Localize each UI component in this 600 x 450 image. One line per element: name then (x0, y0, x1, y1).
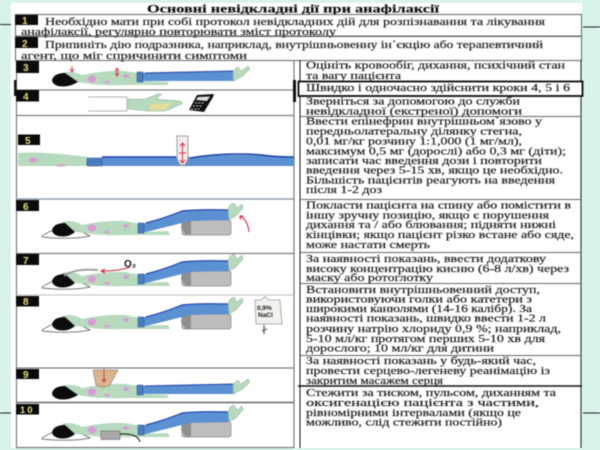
panel: step 4 call for help: 4 (23, 92, 29, 103)
panel: step 9 CPR: 9 (23, 370, 29, 381)
text: step 4 call: Зверніться за допомогою до служби (306, 96, 520, 108)
text: step 5 epinephrine: після 1-2 доз (306, 184, 382, 196)
step 1 box (15, 14, 582, 38)
icon: saline bag: 0,9% (257, 305, 272, 312)
icon: blood pressure cuff (101, 431, 140, 442)
step 2 badge: 2 (22, 39, 28, 50)
slide rule right bottom (583, 412, 600, 414)
panel: step 3 assessment (16, 61, 250, 86)
panel: step 8 IV access (16, 296, 282, 334)
text: step 4 call: невідкладної (екстреної) допомоги (306, 106, 522, 118)
text: step 8 IV access: використовуючи голки або катетери з (306, 294, 532, 306)
text: step 5 epinephrine: максимум 0,5 мг (дорослі) або 0,3 мг (діти); (306, 146, 566, 158)
panel: step 5 epinephrine injection (18, 134, 294, 166)
step 1 badge (15, 15, 38, 27)
step 2 text: Припиніть дію подразника, наприклад, внутрішньовенну ін᾿єкцію або терапевтичний (45, 39, 543, 51)
panel: step 4 call for help (16, 90, 214, 112)
text: step 5 epinephrine: 0,01 мг/кг розчину 1:1,000 (1 мг/мл), (306, 136, 522, 148)
text: step 6 position: може настати смерть (306, 239, 430, 251)
icon: sleeve and hand (88, 94, 183, 111)
callout: perform steps 4, 5 and 6 (298, 82, 582, 96)
panel: step 3 assessment: 3 (23, 63, 29, 74)
text: step 8 IV access: 5-10 мл/кг протягом перших 5-10 хв для (306, 333, 545, 345)
text: step 6 position: кінцівки; якщо пацієнт різко встане або сяде, (306, 229, 574, 241)
text: step 5 epinephrine: Більшість пацієнтів реагують на введення (306, 174, 555, 186)
text: step 8 IV access: дорослого; 10 мл/кг для дитини (306, 342, 494, 354)
icon: compression hands (93, 369, 118, 387)
text: step 10 monitoring: оксигенацією пацієнта з частими, (306, 397, 539, 409)
text: step 6 position: дихання та / або блювання; підняти нижні (306, 219, 556, 231)
text: step 9 CPR: провести серцево-легеневу реанімацію із (306, 365, 550, 377)
text: step 5 epinephrine (306, 116, 566, 196)
icon: saline bag (255, 296, 282, 334)
panel: step 10 monitoring: 10 (20, 405, 35, 416)
panel: step 5 epinephrine injection: 5 (25, 136, 31, 147)
text: step 5 epinephrine: Ввести епінефрин внутрішньом`язово у (306, 116, 543, 128)
panel: step 7 oxygen (16, 254, 243, 289)
panel: step 6 raise legs (16, 200, 249, 238)
label: O2: O₂ (124, 259, 136, 270)
text: step 9 CPR (306, 355, 550, 387)
text: step 10 monitoring: можливо, слід стежити постійно) (306, 416, 502, 428)
panel: step 6 raise legs: 6 (23, 202, 29, 213)
text: step 7 oxygen: За наявності показань, ввести додаткову (306, 253, 547, 265)
text: step 8 IV access: широкими канюлями (14-16 калібр). За (306, 303, 532, 315)
text: step 8 IV access: наявності показань, швидко ввести 1-2 л (306, 312, 547, 324)
step 1 text: анафілаксії, регулярно повторювати зміст протоколу (21, 26, 337, 38)
icon: saline bag: NaCl (258, 312, 273, 319)
text: step 8 IV access: Встановити внутрішньовенний доступ, (306, 284, 540, 296)
text: step 3 assess: Оцініть кровообіг, дихання, психічний стан (306, 60, 565, 72)
text: step 10 monitoring (306, 387, 556, 428)
text: step 8 IV access (306, 284, 561, 354)
text: step 7 oxygen: маску або ротоглотку (306, 272, 434, 284)
icon: oxygen mask tube (64, 270, 98, 276)
arrow: raise legs (240, 216, 249, 232)
text: step 5 epinephrine: передньолатеральну ділянку стегна, (306, 126, 522, 138)
title: Основні невідкладні дії при анафілаксії (147, 2, 440, 16)
panel: step 8 IV access: 8 (23, 297, 29, 308)
panel: step 10 monitoring (16, 404, 243, 442)
callout: perform steps 4, 5 and 6: Швидко і одночасно здійснити кроки 4, 5 і 6 (306, 82, 571, 94)
slide rule left top (0, 24, 11, 26)
illustration column frame (14, 60, 296, 448)
panel: step 9 CPR (16, 369, 250, 400)
icon: mobile phone (189, 94, 214, 112)
text column frame (298, 60, 582, 448)
icon: syringe (177, 136, 188, 165)
step 1 text (21, 16, 545, 38)
text: step 6 position: іншу зручну позицію, якщо є порушення (306, 210, 549, 222)
step 2 text (21, 39, 543, 62)
text: step 6 position (306, 200, 574, 251)
text: step 9 CPR: закритим масажем серця (306, 375, 443, 387)
text: step 3 assess: та вагу пацієнта (306, 70, 401, 82)
step 2 text: агент, що міг спричинити симптоми (21, 50, 247, 62)
text: step 10 monitoring: Стежити за тиском, пульсом, диханням та (306, 387, 556, 399)
text: step 7 oxygen (306, 253, 569, 284)
text: step 3 assess (306, 60, 565, 82)
text: step 7 oxygen: високу концентрацію кисню (6-8 л/хв) через (306, 263, 569, 275)
step 1 text: Необхідно мати при собі протокол невідкладних дій для розпізнавання та лікування (45, 16, 545, 28)
text: step 6 position: Покласти пацієнта на спину або помістити в (306, 200, 571, 212)
step 2 box (15, 36, 582, 62)
text: step 4 call (306, 96, 522, 118)
step 1 badge: 1 (22, 16, 28, 27)
slide rule right top (583, 26, 600, 28)
text: step 10 monitoring: рівномірними інтервалами (якщо це (306, 407, 521, 419)
slide rule left bottom (0, 412, 11, 414)
text: step 9 CPR: За наявності показань у будь-який час, (306, 355, 536, 367)
step 2 badge (15, 37, 38, 50)
text: step 5 epinephrine: записати час введення дози і повторити (306, 155, 542, 167)
arrow: oxygen flow (101, 267, 130, 273)
panel: step 7 oxygen: 7 (23, 256, 29, 267)
text: step 5 epinephrine: введення через 5-15 хв, якщо це необхідно. (306, 164, 563, 176)
text: step 8 IV access: розчину натрію хлориду 0,9 %; наприклад, (306, 323, 561, 335)
